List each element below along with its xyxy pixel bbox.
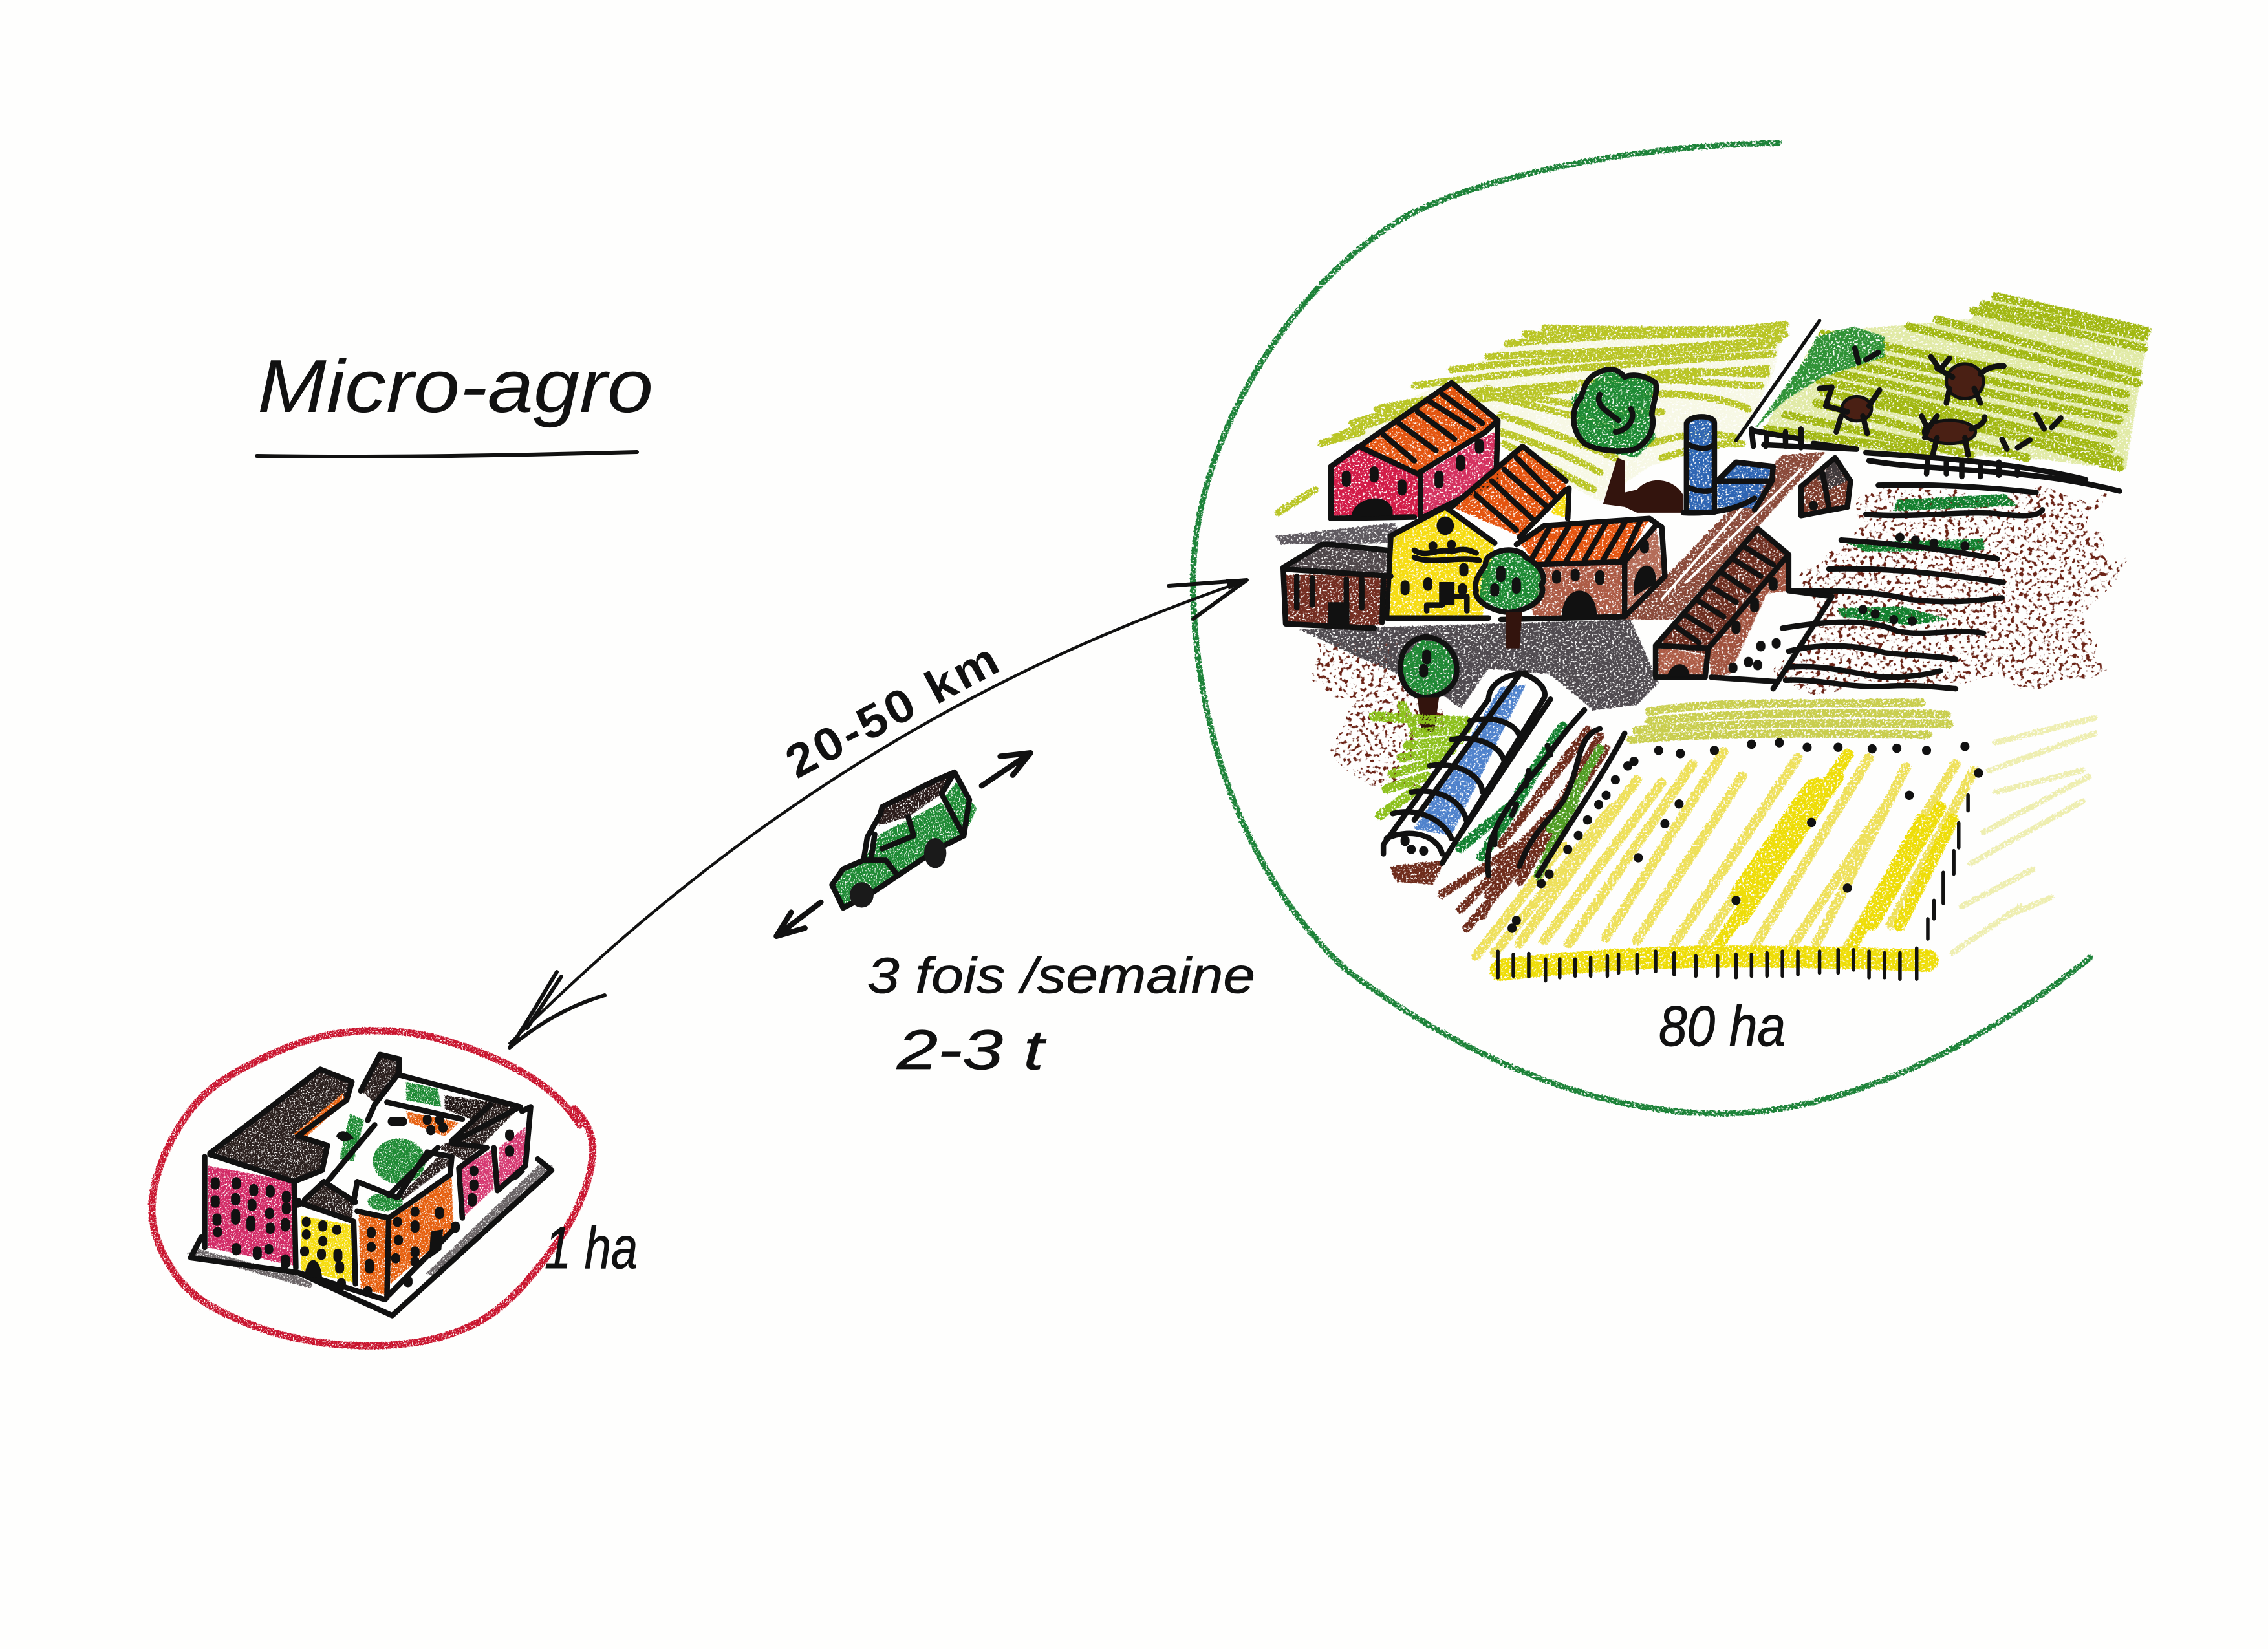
red barn with orange roof [1331,383,1498,519]
label: 2-3 t: 2-3 t [896,1019,1046,1081]
label: 3 fois /semaine: 3 fois /semaine [867,947,1255,1004]
truck with two direction arrows [776,753,1031,936]
light field above the grain [1374,702,2095,953]
green circle around farm [1193,143,2090,1114]
farm illustration [1275,295,2150,1058]
arrow towards farm [982,753,1031,786]
label: 1 ha: 1 ha [545,1215,638,1281]
pasture and ground colour [1275,295,2150,790]
arrow towards city [776,902,821,936]
greenhouse tunnel [1383,673,1545,863]
long brown shed [1656,528,1832,689]
ink outlines and windows [191,1055,552,1315]
title: Micro-agro: Micro-agro [257,344,653,428]
crop rows [1782,485,2042,689]
animals: three cows and grass tufts [1820,348,2061,455]
city block illustration in red circle [152,1031,593,1346]
fences and pasture line [1736,321,2120,491]
tree in front of the yellow house [1476,550,1544,649]
big green tree, mound, blue silo and shed [1572,369,1773,513]
label: 80 ha: 80 ha [1659,994,1786,1058]
garden strips beside greenhouse [1390,699,1625,928]
building colour fills [196,1055,546,1295]
double arrow curve: 20-50 km route [509,579,1248,1048]
second small tree [1400,637,1458,732]
truck body [832,772,977,908]
title: Micro-agro [257,344,653,457]
label: 20-50 km: 20-50 km [777,632,1010,788]
small brown shed [1801,458,1850,515]
yellow house with orange roof [1387,446,1569,618]
pink-brown house with orange roof [1501,519,1665,620]
gray roof brown barn [1283,544,1391,628]
yellow grain field [1476,742,1978,981]
red circle [152,1031,593,1346]
